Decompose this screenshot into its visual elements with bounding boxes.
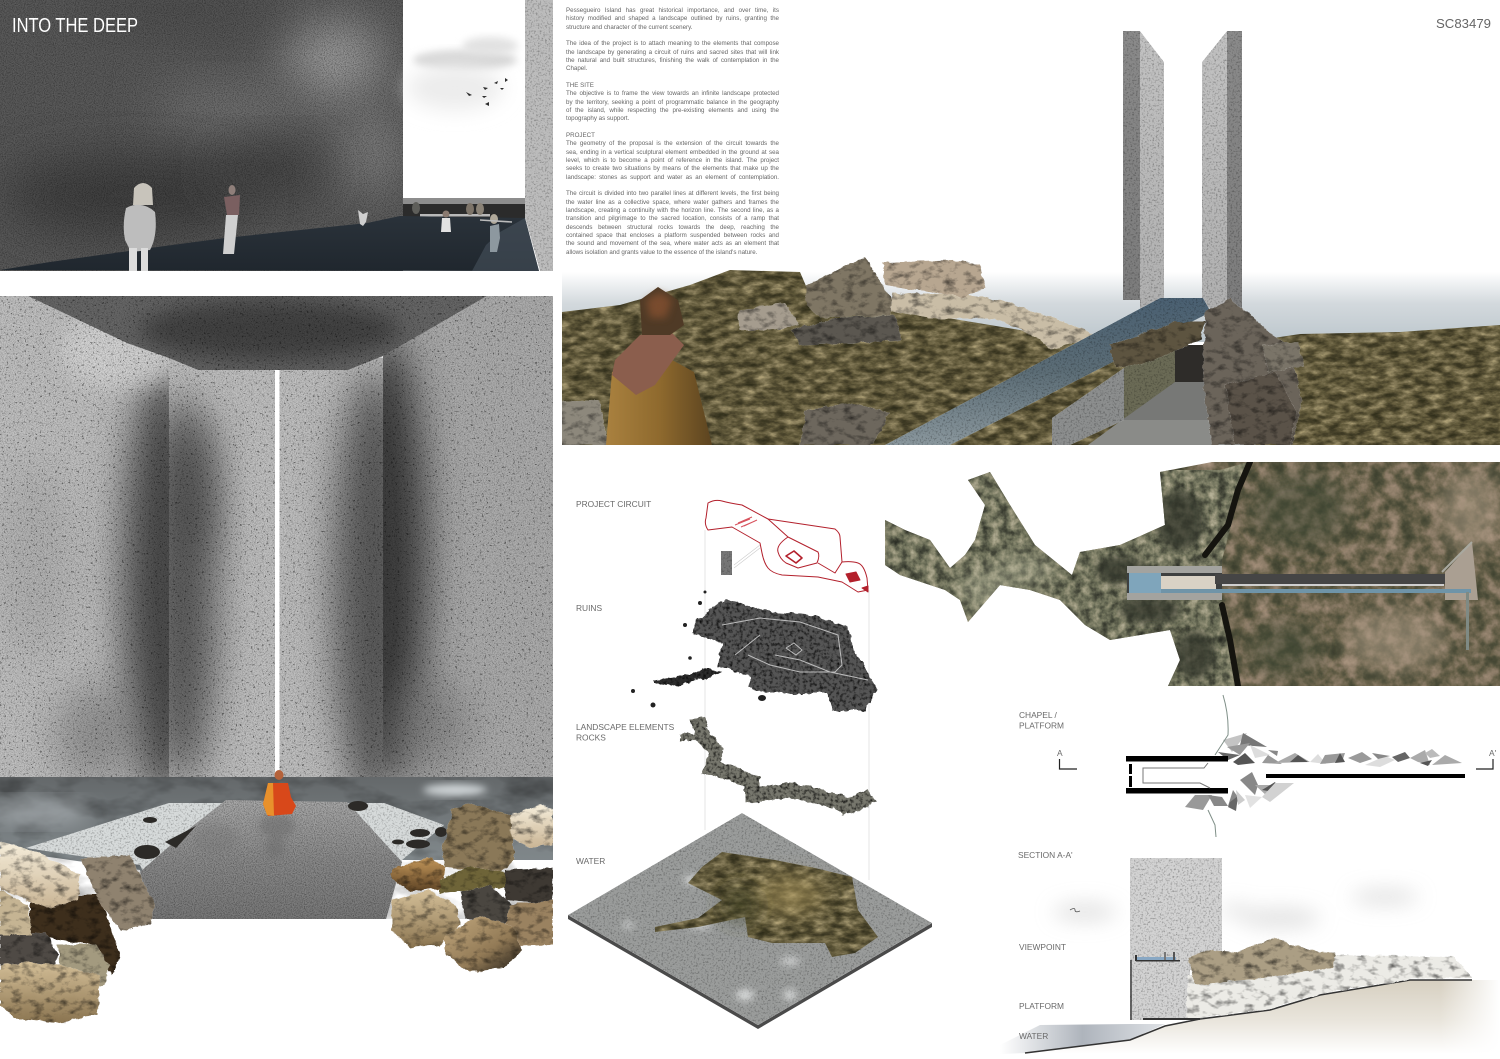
panel: chapel platform plan bbox=[1019, 695, 1497, 837]
icon: flock of birds bbox=[466, 78, 508, 106]
text block: project description copy: PROJECT bbox=[566, 132, 595, 139]
text block: project description copy: Pessegueiro Island has great historical importance, and over time, its bbox=[566, 7, 779, 14]
guide lines bbox=[705, 530, 869, 880]
monolith right bbox=[1202, 31, 1242, 318]
text block: project description copy: of the island, while respecting the pre-existing elements and using the bbox=[566, 107, 779, 114]
text block: project description copy: structure and character of the current scenery. bbox=[566, 24, 692, 31]
label: chapel platform: CHAPEL / bbox=[1019, 710, 1057, 720]
text block: project description copy: THE SITE bbox=[566, 82, 594, 89]
panel: chapel interior render bbox=[0, 296, 553, 1023]
plan inner outline bbox=[1143, 763, 1210, 788]
icon: bird bbox=[1070, 908, 1080, 912]
label: landscape elements rocks: LANDSCAPE ELEMENTS bbox=[576, 722, 674, 732]
text block: project description copy: sea, ending in a vertical sculptural element embedded in the ground at sea bbox=[566, 149, 779, 156]
rocky peninsula bbox=[885, 462, 1248, 686]
light slit bbox=[275, 370, 280, 777]
label: section: SECTION A-A' bbox=[1018, 850, 1073, 860]
contour line bbox=[1208, 695, 1228, 837]
dark boulders at shoreline bbox=[1096, 490, 1215, 679]
label: ruins: RUINS bbox=[576, 603, 602, 613]
text block: project description copy: Chapel. bbox=[566, 65, 587, 72]
text block: project description copy: The idea of the project is to attach meaning to the elements that compose bbox=[566, 40, 779, 47]
layer: red project circuit bbox=[705, 500, 868, 592]
panel: project diagrams, exploded axonometric bbox=[568, 499, 932, 1029]
rocks on top bbox=[1188, 938, 1335, 985]
text block: project description copy: the water line as a collective space, where water gathers and frames the bbox=[566, 199, 779, 206]
vegetation patches bbox=[1250, 472, 1350, 678]
dark crevice bbox=[1205, 462, 1250, 686]
far ledge and bench bbox=[403, 198, 525, 219]
plan walls bbox=[1126, 756, 1465, 794]
central ramp bbox=[140, 800, 402, 919]
label: water: WATER bbox=[1019, 1031, 1048, 1041]
grass terrain bbox=[562, 270, 1500, 445]
section marker A' bbox=[1476, 748, 1497, 769]
panel: section A-A' bbox=[1000, 850, 1500, 1054]
text block: project description copy: history modified and shaped a landscape outlined by ruins, granting the bbox=[566, 15, 779, 22]
text block: project description copy: the sound and movement of the sea, where water acts as an element that bbox=[566, 240, 779, 247]
left wall bbox=[0, 296, 169, 777]
icon: chapel miniature bbox=[721, 551, 732, 575]
text block: project description copy: contained space that encloses a platform suspended between rocks and bbox=[566, 232, 779, 239]
label: platform: PLATFORM bbox=[1019, 1001, 1064, 1011]
text block: project description copy: landscape, creating a continuity with the horizon line. The second line, as a bbox=[566, 207, 779, 214]
ground line bbox=[1025, 980, 1472, 1053]
figure: children in water bbox=[358, 202, 512, 252]
panel: landscape render with twin monolith bbox=[560, 31, 1500, 445]
plan rock facets bbox=[1185, 733, 1462, 811]
text block: project description copy: descends between structural rocks towards the deep, reaching the bbox=[566, 224, 779, 231]
reflection of the monk bbox=[193, 814, 295, 858]
platform with foam bbox=[26, 803, 444, 870]
text block: project description copy: The circuit is divided into two parallel lines at different levels, the first being bbox=[566, 190, 779, 197]
rocks: foreground bbox=[560, 400, 890, 445]
text block: project description copy: seeks to create two situations by means of the elements that make up the bbox=[566, 165, 779, 172]
ground bbox=[1025, 980, 1500, 1054]
right wall bbox=[383, 296, 553, 777]
platform slab bbox=[1143, 1018, 1200, 1020]
label: project circuit: PROJECT CIRCUIT bbox=[576, 499, 651, 509]
panel: contemplation pool render bbox=[0, 0, 553, 271]
sky opening bbox=[394, 35, 518, 111]
project footprint bbox=[1127, 542, 1478, 650]
sky haze bbox=[562, 272, 1500, 342]
monolith left bbox=[1123, 31, 1164, 310]
text block: project description copy: allows isolation and grants value to the essence of the island's nature. bbox=[566, 249, 757, 256]
text block: project description copy: The objective is to frame the view towards an infinite landscape protected bbox=[566, 90, 779, 97]
layer: ruins island bbox=[631, 590, 877, 710]
dark stones on foam bbox=[134, 801, 447, 859]
viewpoint deck bbox=[1135, 952, 1180, 962]
rocks: left pile bbox=[0, 842, 155, 1023]
text block: project description copy: the landscape by generating a circuit of ruins and sacred sites that will link bbox=[566, 49, 779, 56]
figure: standing person bbox=[223, 185, 240, 254]
layer: water plate with island bbox=[568, 813, 932, 1029]
rocks along channel bbox=[1110, 322, 1205, 368]
island texture bbox=[655, 852, 878, 957]
rocks: right pile bbox=[392, 803, 553, 972]
text block: project description copy: by the territory, seeking a point of programmatic balance in the geography bbox=[566, 99, 779, 106]
section marker A: A bbox=[1057, 748, 1063, 758]
text block: project description copy: topography as support. bbox=[566, 115, 629, 122]
title: INTO THE DEEP bbox=[12, 15, 138, 37]
water floor bbox=[0, 216, 539, 271]
section wall line bbox=[1130, 960, 1132, 1020]
text block: project description copy: The geometry of the proposal is the extension of the circuit towards the bbox=[566, 140, 779, 147]
text block: project description copy: transition and pilgrimage to the sacred location, consists of a ramp that bbox=[566, 215, 779, 222]
ceiling bbox=[28, 296, 488, 371]
label: chapel platform: PLATFORM bbox=[1019, 720, 1064, 730]
clouds bbox=[1053, 889, 1419, 928]
back wall bbox=[169, 356, 383, 777]
ground fade at right edge bbox=[1440, 980, 1500, 1054]
sea bbox=[0, 777, 553, 919]
figure: man in hooded jacket bbox=[606, 287, 712, 445]
text block: project description copy bbox=[566, 7, 779, 256]
text block: project description copy: landscape: stones as support and water as an element of contemplation. bbox=[566, 174, 779, 181]
water channel bbox=[885, 298, 1211, 445]
sunken ramp bbox=[1052, 338, 1256, 445]
layer: rocks ridge bbox=[680, 718, 872, 812]
panel: site plan aerial bbox=[885, 462, 1500, 686]
water body bbox=[1000, 1024, 1165, 1054]
label: viewpoint: VIEWPOINT bbox=[1019, 942, 1066, 952]
boulders behind bbox=[738, 257, 986, 345]
label: water: WATER bbox=[576, 856, 605, 866]
rocks: right stack bbox=[1203, 298, 1304, 445]
boulder line bbox=[1222, 562, 1440, 572]
text block: project description copy: level, which is to become a point of reference in the island. The project bbox=[566, 157, 779, 164]
section marker A bbox=[1057, 748, 1077, 769]
stone masonry bbox=[1186, 955, 1472, 1020]
pale rock ground bbox=[885, 293, 1100, 350]
label: landscape elements rocks: ROCKS bbox=[576, 732, 606, 742]
project code: SC83479 bbox=[1436, 16, 1491, 31]
text block: project description copy: the natural and built structures, finishing the walk of contemplation in the bbox=[566, 57, 779, 64]
figure: seated monk bbox=[263, 770, 296, 816]
right concrete wall bbox=[525, 0, 553, 271]
concrete monolith in section bbox=[1130, 858, 1222, 1020]
figure: woman in white bbox=[124, 183, 156, 271]
section marker A': A' bbox=[1489, 748, 1497, 758]
